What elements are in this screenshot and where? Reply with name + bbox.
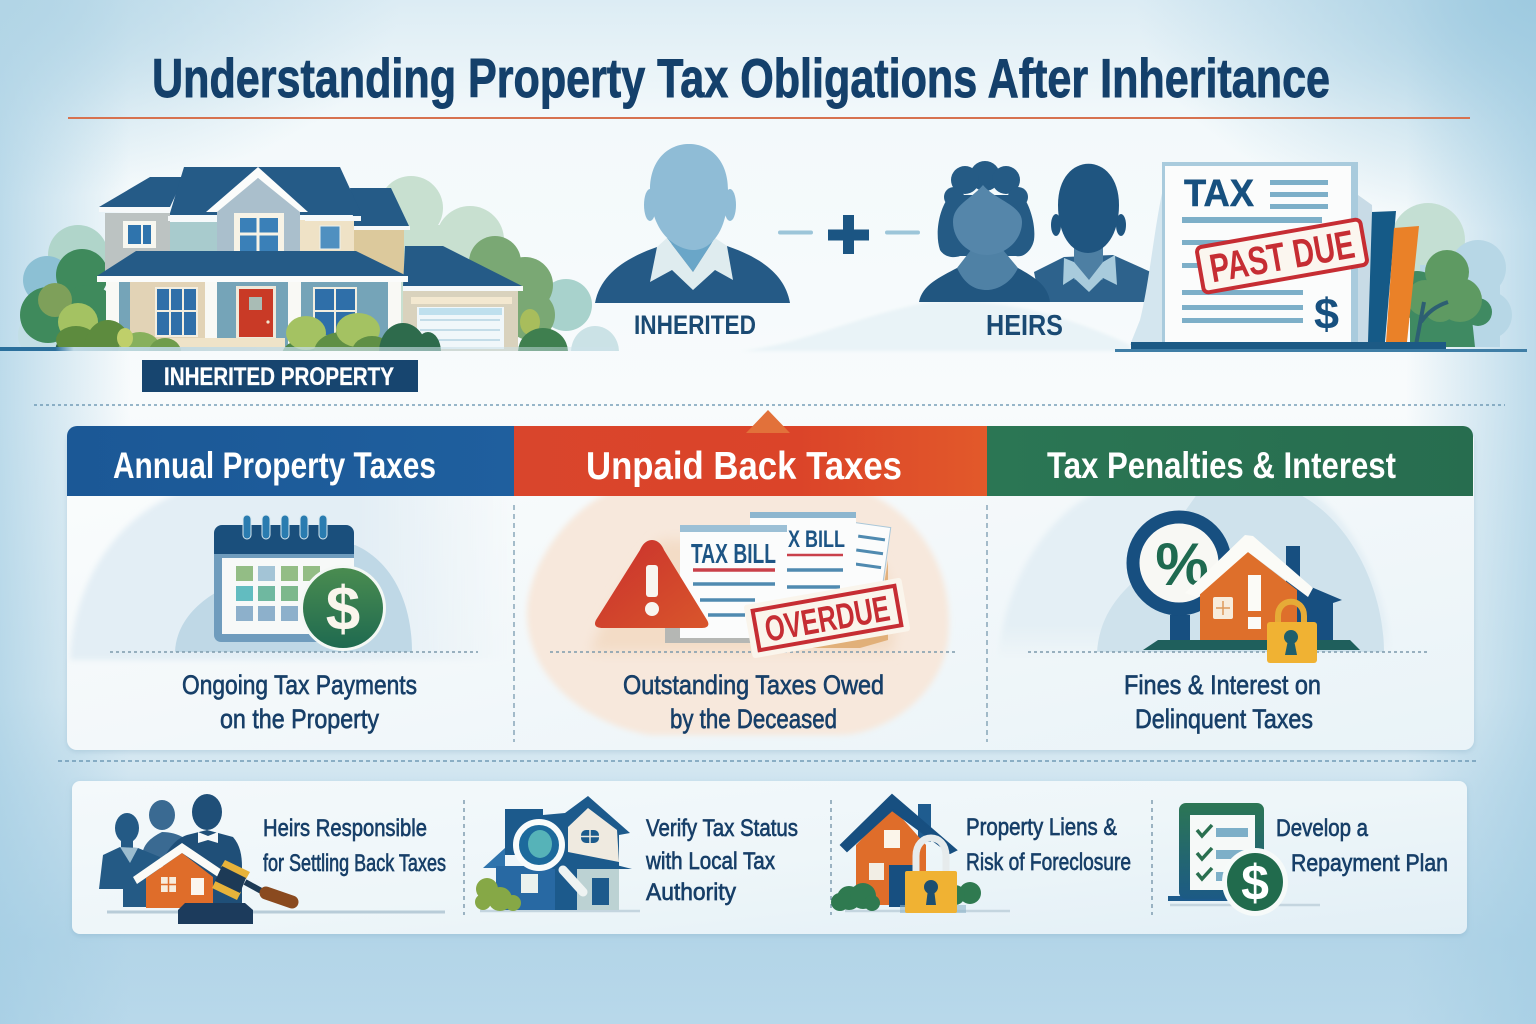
text: heirs responsible xyxy=(263,815,446,877)
icon: calendar with dollar: $ xyxy=(326,575,360,644)
icon: calendar with dollar xyxy=(214,515,386,651)
icon: overdue tax bills: TAX BILL xyxy=(691,538,776,569)
text: develop a repayment plan: Repayment Plan xyxy=(1291,850,1448,877)
icon: tax document past due xyxy=(1115,162,1527,352)
icon: deceased owner silhouette xyxy=(595,144,790,303)
icon: inherited house xyxy=(0,167,619,351)
icon: tax document past due: $ xyxy=(1314,290,1339,339)
section divider xyxy=(34,404,1505,406)
text: verify tax status: Verify Tax Status xyxy=(646,815,798,842)
header: unpaid back taxes: Unpaid Back Taxes xyxy=(586,445,902,488)
text: verify tax status xyxy=(645,815,798,906)
text: outstanding taxes owed: Outstanding Taxes Owed xyxy=(623,670,884,700)
text: property liens: Property Liens & xyxy=(966,814,1117,841)
icon: overdue tax bills xyxy=(595,512,910,658)
icon: tax document past due: TAX xyxy=(1184,173,1255,215)
text: ongoing tax payments xyxy=(182,670,417,734)
text: heirs responsible: Heirs Responsible xyxy=(263,815,427,842)
header: annual property taxes: Annual Property Taxes xyxy=(113,445,436,486)
text: verify tax status: with Local Tax xyxy=(645,848,775,875)
marker: triangle pointer xyxy=(746,410,790,433)
icon: overdue tax bills: X BILL xyxy=(788,526,845,553)
icon: house with padlock xyxy=(831,795,981,913)
panel: action items xyxy=(72,781,1467,934)
blobs behind the icons xyxy=(70,485,1390,735)
text: heirs responsible: for Settling Back Taxes xyxy=(263,850,446,877)
icon: plus connector xyxy=(780,215,918,254)
icon: heirs, house and gavel xyxy=(99,794,292,924)
icon: penalty house with percent and lock: % xyxy=(1155,531,1209,598)
bushes xyxy=(56,303,568,351)
header: tax penalties and interest xyxy=(987,426,1473,496)
text: fines and interest: Delinquent Taxes xyxy=(1135,704,1313,734)
text: ongoing tax payments: on the Property xyxy=(220,704,379,734)
icon: tax document past due: PAST DUE xyxy=(1206,223,1358,291)
label: heirs: HEIRS xyxy=(986,310,1063,342)
icon: overdue tax bills: OVERDUE xyxy=(761,587,893,650)
icon: repayment checklist with dollar xyxy=(1168,803,1288,916)
hill behind the top scene xyxy=(740,301,1130,351)
section divider xyxy=(58,760,1478,762)
text: property liens: Risk of Foreclosure xyxy=(966,849,1131,876)
text: outstanding taxes owed xyxy=(623,670,884,734)
text: property liens xyxy=(966,814,1131,876)
text: develop a repayment plan xyxy=(1276,815,1448,877)
icon: right-side trees and books xyxy=(1350,195,1512,347)
icon: heirs silhouettes xyxy=(919,161,1162,302)
text: fines and interest: Fines & Interest on xyxy=(1124,670,1321,700)
text: ongoing tax payments: Ongoing Tax Payments xyxy=(182,670,417,700)
text: outstanding taxes owed: by the Deceased xyxy=(670,704,837,734)
label: inherited: INHERITED xyxy=(634,310,756,340)
header: unpaid back taxes xyxy=(514,426,987,496)
panel: tax categories xyxy=(67,410,1474,750)
icon: repayment checklist with dollar: $ xyxy=(1241,855,1269,911)
icon: house under magnifier xyxy=(475,796,632,911)
text: fines and interest xyxy=(1124,670,1321,734)
text: develop a repayment plan: Develop a xyxy=(1276,815,1369,842)
icon: penalty house with percent and lock xyxy=(1133,517,1360,663)
text: verify tax status: Authority xyxy=(646,879,736,906)
label: inherited property: INHERITED PROPERTY xyxy=(164,363,394,391)
header: tax penalties and interest: Tax Penalties & Interest xyxy=(1047,445,1396,486)
header: annual property taxes xyxy=(67,426,514,496)
